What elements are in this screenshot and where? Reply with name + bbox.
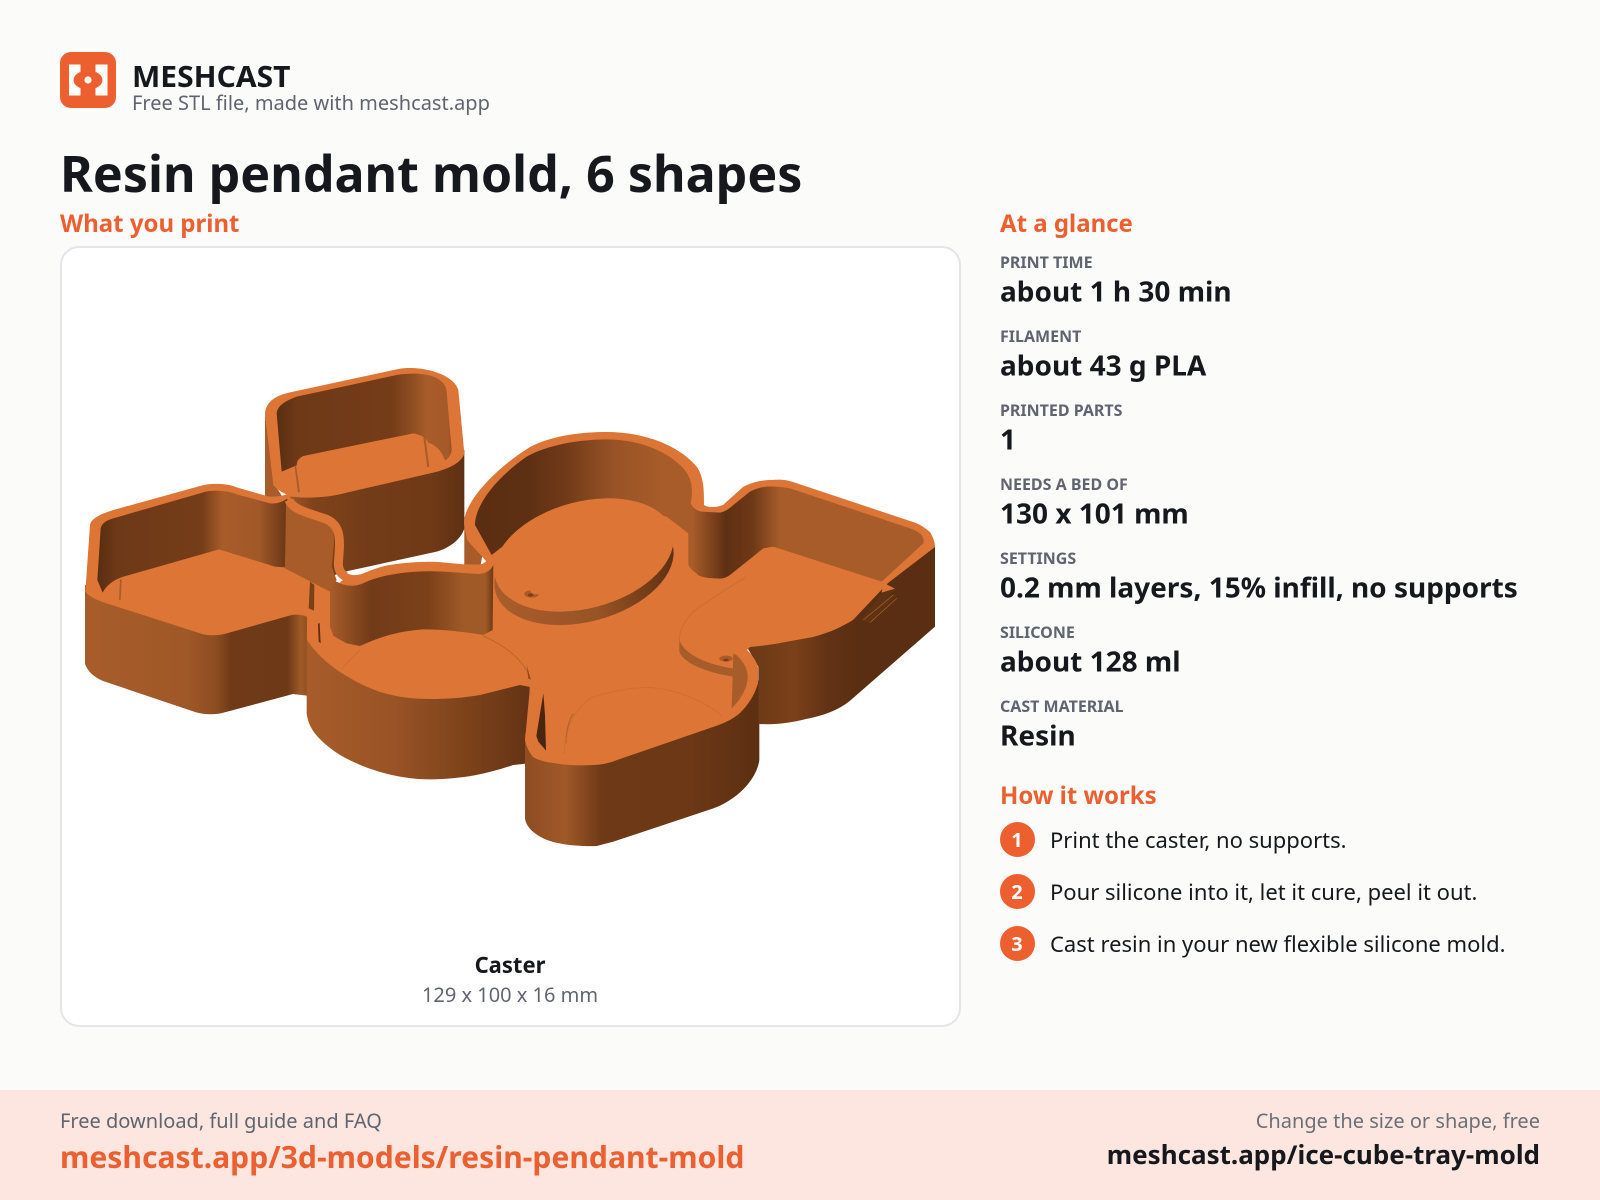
panel: caster preview [61,247,960,1026]
stat: print time: about 1 h 30 min [1000,272,1232,310]
floor marks [119,579,122,600]
stat: filament [1000,325,1207,384]
footer band [0,1090,1600,1200]
stat: filament: about 43 g PLA [1000,346,1207,384]
cavity: left hexagon [97,491,321,643]
step 2: 2 [1011,878,1023,905]
footer left link: meshcast.app/3d-models/resin-pendant-mold [60,1136,744,1177]
panel: at a glance [1000,207,1518,754]
inner wall [277,374,452,472]
central inner wall [330,565,493,646]
heading: what you print: What you print [60,207,239,240]
oval outer sliver [464,525,482,564]
rim stroke [289,500,493,578]
disc side [482,493,686,644]
stat: print time: PRINT TIME [1000,251,1093,273]
footer right link: meshcast.app/ice-cube-tray-mold [1107,1136,1540,1172]
panel card [61,247,960,1026]
footer right label: Change the size or shape, free [1256,1107,1540,1134]
caption: dimensions: 129 x 100 x 16 mm [422,981,598,1008]
light wall [285,503,337,592]
wing pendant hole [719,656,733,662]
stat: settings: SETTINGS [1000,547,1076,569]
caption: part name: Caster [475,950,546,980]
heading: at a glance: At a glance [1000,207,1133,240]
rim sliver [733,654,748,694]
stat: bed size: 130 x 101 mm [1000,494,1189,532]
stat: print time [1000,251,1232,310]
S-curve divider [285,500,493,646]
step 3: Cast resin in your new flexible silicone mold. [1050,929,1506,959]
disc top [482,480,686,630]
corner sliver [732,653,748,708]
brand header [60,52,490,116]
brand tagline: Free STL file, made with meshcast.app [132,89,490,116]
disc hole [524,590,539,598]
stat: cast material [1000,695,1124,754]
title: Resin pendant mold, 6 shapes [60,138,802,207]
inner wall [475,439,924,582]
stat: settings [1000,547,1518,606]
inner wall [97,491,287,593]
stat: filament: FILAMENT [1000,325,1081,347]
bottom-right pendant outline [564,687,722,754]
panel: how it works [1000,779,1506,961]
stat: silicone: about 128 ml [1000,642,1181,680]
stat: bed size: NEEDS A BED OF [1000,473,1128,495]
wing pendant side [679,640,734,677]
step 1: 1 [1011,826,1023,853]
footer left label: Free download, full guide and FAQ [60,1107,382,1134]
stat: cast material: Resin [1000,716,1076,754]
stat: printed parts [1000,399,1123,458]
stat: silicone: SILICONE [1000,621,1075,643]
icon: meshcast logo [60,52,116,108]
floor marks [423,437,429,467]
wing pendant outline [679,577,747,641]
stat: printed parts: PRINTED PARTS [1000,399,1123,421]
stat: bed size [1000,473,1189,532]
dark wedge [536,693,546,751]
stat: printed parts: 1 [1000,420,1016,458]
bottom-left circle outline [483,636,531,679]
footer background [0,1090,1600,1200]
step 1: Print the caster, no supports. [1050,825,1347,855]
white gap [347,530,464,575]
outer walls [85,413,935,846]
3D model: caster mold [85,368,935,846]
step 3: 3 [1011,930,1023,957]
front floor details [342,636,748,754]
jagged mesh edge [861,589,897,623]
stat: cast material: CAST MATERIAL [1000,695,1124,717]
cavity: oval and wing [475,439,924,694]
brand name: MESHCAST [132,55,290,96]
stat: settings: 0.2 mm layers, 15% infill, no supports [1000,568,1518,606]
stat: silicone [1000,621,1181,680]
step 2: Pour silicone into it, let it cure, peel it out. [1050,877,1477,907]
heading: how it works: How it works [1000,779,1157,812]
top surface and rims [85,368,935,765]
cavity: top-left [277,374,452,493]
